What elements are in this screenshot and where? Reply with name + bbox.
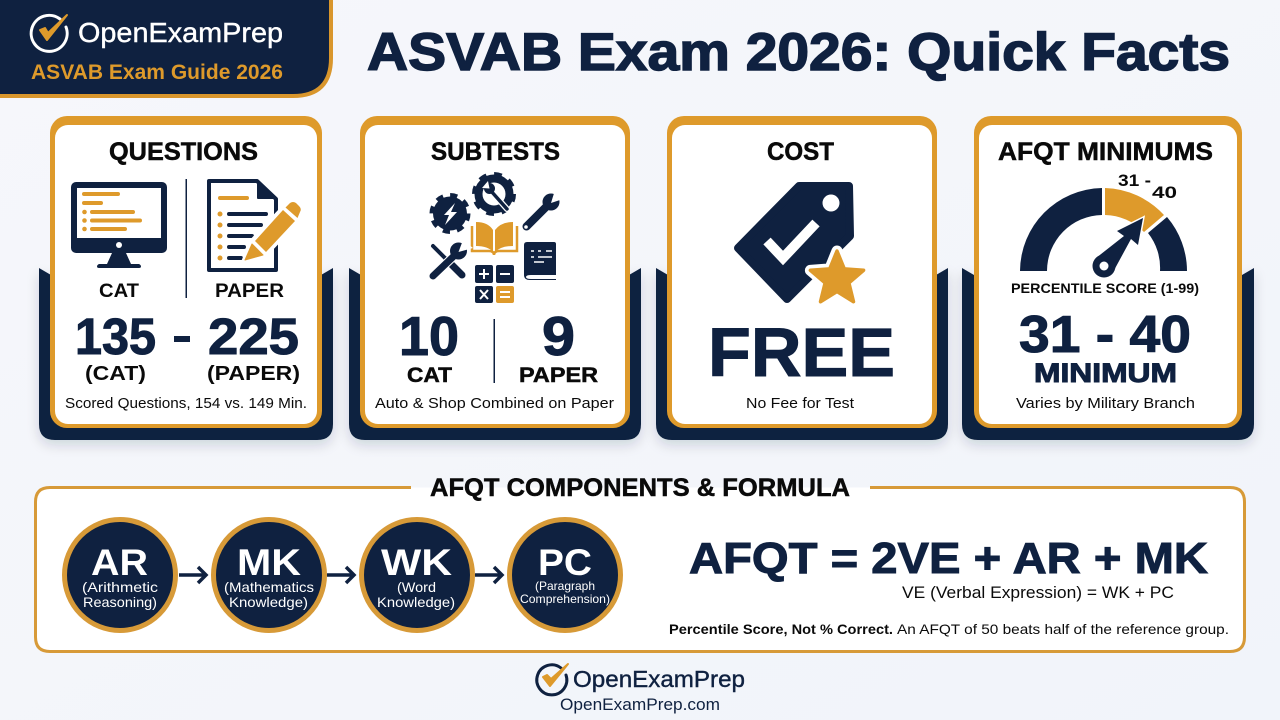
stat: FREE: FREE <box>708 314 895 391</box>
icon: computer <box>71 182 167 268</box>
icon: wrench gear <box>474 174 514 214</box>
caption: Auto & Shop Combined on Paper <box>375 395 614 412</box>
caption: Scored Questions, 154 vs. 149 Min. <box>65 395 307 412</box>
component: WK: Knowledge) <box>377 594 455 610</box>
label: CAT: CAT <box>99 281 139 302</box>
formula: AFQT = 2VE + AR + MK <box>689 534 1208 583</box>
caption: Varies by Military Branch <box>1016 395 1195 412</box>
component: AR: (Arithmetic <box>82 579 158 595</box>
icon: footer check <box>537 664 568 695</box>
footer brand: OpenExamPrep <box>573 666 745 692</box>
header badge <box>0 0 331 96</box>
stat label: minimum: MINIMUM <box>1034 358 1177 388</box>
header subtitle: ASVAB Exam Guide 2026 <box>31 61 283 84</box>
gauge value continued: 40 <box>1152 183 1177 202</box>
component: PC <box>510 520 620 630</box>
gauge needle <box>1092 218 1143 278</box>
icon: open book <box>472 222 517 255</box>
stat label: CAT: CAT <box>407 364 452 387</box>
heading: AFQT COMPONENTS & FORMULA <box>430 474 850 502</box>
gauge label: PERCENTILE SCORE (1-99) <box>1011 280 1199 296</box>
stat label: CAT: (CAT) <box>85 363 146 385</box>
component: MK: (Mathematics <box>224 579 314 595</box>
percentile note: Percentile Score, Not % Correct. <box>669 621 893 637</box>
heading: QUESTIONS <box>109 138 258 166</box>
gauge chart <box>1020 171 1187 278</box>
gauge value: 31 - <box>1118 171 1151 190</box>
footer url: OpenExamPrep.com <box>560 695 720 714</box>
icon: price tag <box>738 186 850 299</box>
icon: logo check <box>31 15 67 51</box>
stat label: PAPER: PAPER <box>519 364 598 387</box>
arrow <box>475 567 502 583</box>
component: AR: Reasoning) <box>83 594 157 610</box>
icon: wrench <box>524 190 566 229</box>
arrow <box>327 567 354 583</box>
title: ASVAB Exam 2026: Quick Facts <box>367 23 1230 82</box>
icon: subtest tools <box>432 174 566 303</box>
formula note: VE (Verbal Expression) = WK + PC <box>902 584 1174 602</box>
component: MK: Knowledge) <box>229 594 308 610</box>
component: AR <box>64 520 176 630</box>
percentile note: An AFQT of 50 beats half of the reference group. <box>897 621 1229 637</box>
heading: AFQT MINIMUMS <box>998 138 1213 166</box>
component: PC: (Paragraph <box>535 579 595 593</box>
stat: 10: 10 <box>399 305 459 367</box>
stat: 9: 9 <box>542 305 575 367</box>
stat label: PAPER: (PAPER) <box>207 363 300 385</box>
heading: SUBTESTS <box>431 138 560 166</box>
arrow <box>179 567 206 583</box>
component: PC: PC <box>538 542 592 583</box>
component: MK <box>214 520 324 630</box>
icon: reference book <box>524 242 556 280</box>
brand name: OpenExamPrep <box>78 17 283 48</box>
component: PC: Comprehension) <box>520 592 610 606</box>
component: AR: AR <box>91 542 148 583</box>
heading: COST <box>767 138 834 166</box>
panel: AFQT minimums <box>962 116 1254 440</box>
panel: questions <box>39 116 333 440</box>
component: WK: (Word <box>397 579 436 595</box>
icon: lightning gear <box>432 195 468 232</box>
component: WK <box>362 520 472 630</box>
component: WK: WK <box>381 542 452 583</box>
panel: AFQT components and formula <box>36 474 1244 652</box>
component: MK: MK <box>237 542 301 583</box>
stat: 225: 225 <box>208 308 299 365</box>
icon: crossed tools <box>433 240 473 276</box>
icon: paper and pencil <box>209 181 301 270</box>
icon: star <box>810 251 864 302</box>
panel: subtests <box>349 116 641 440</box>
stat: 31 - 40: 31 - 40 <box>1019 306 1191 364</box>
stat: 135: 135 <box>75 308 156 365</box>
label: PAPER: PAPER <box>215 281 284 302</box>
panel: cost <box>656 116 948 440</box>
icon: calculator <box>475 265 514 303</box>
caption: No Fee for Test <box>746 395 855 412</box>
percentile note <box>669 621 1229 637</box>
footer logo <box>537 664 745 714</box>
